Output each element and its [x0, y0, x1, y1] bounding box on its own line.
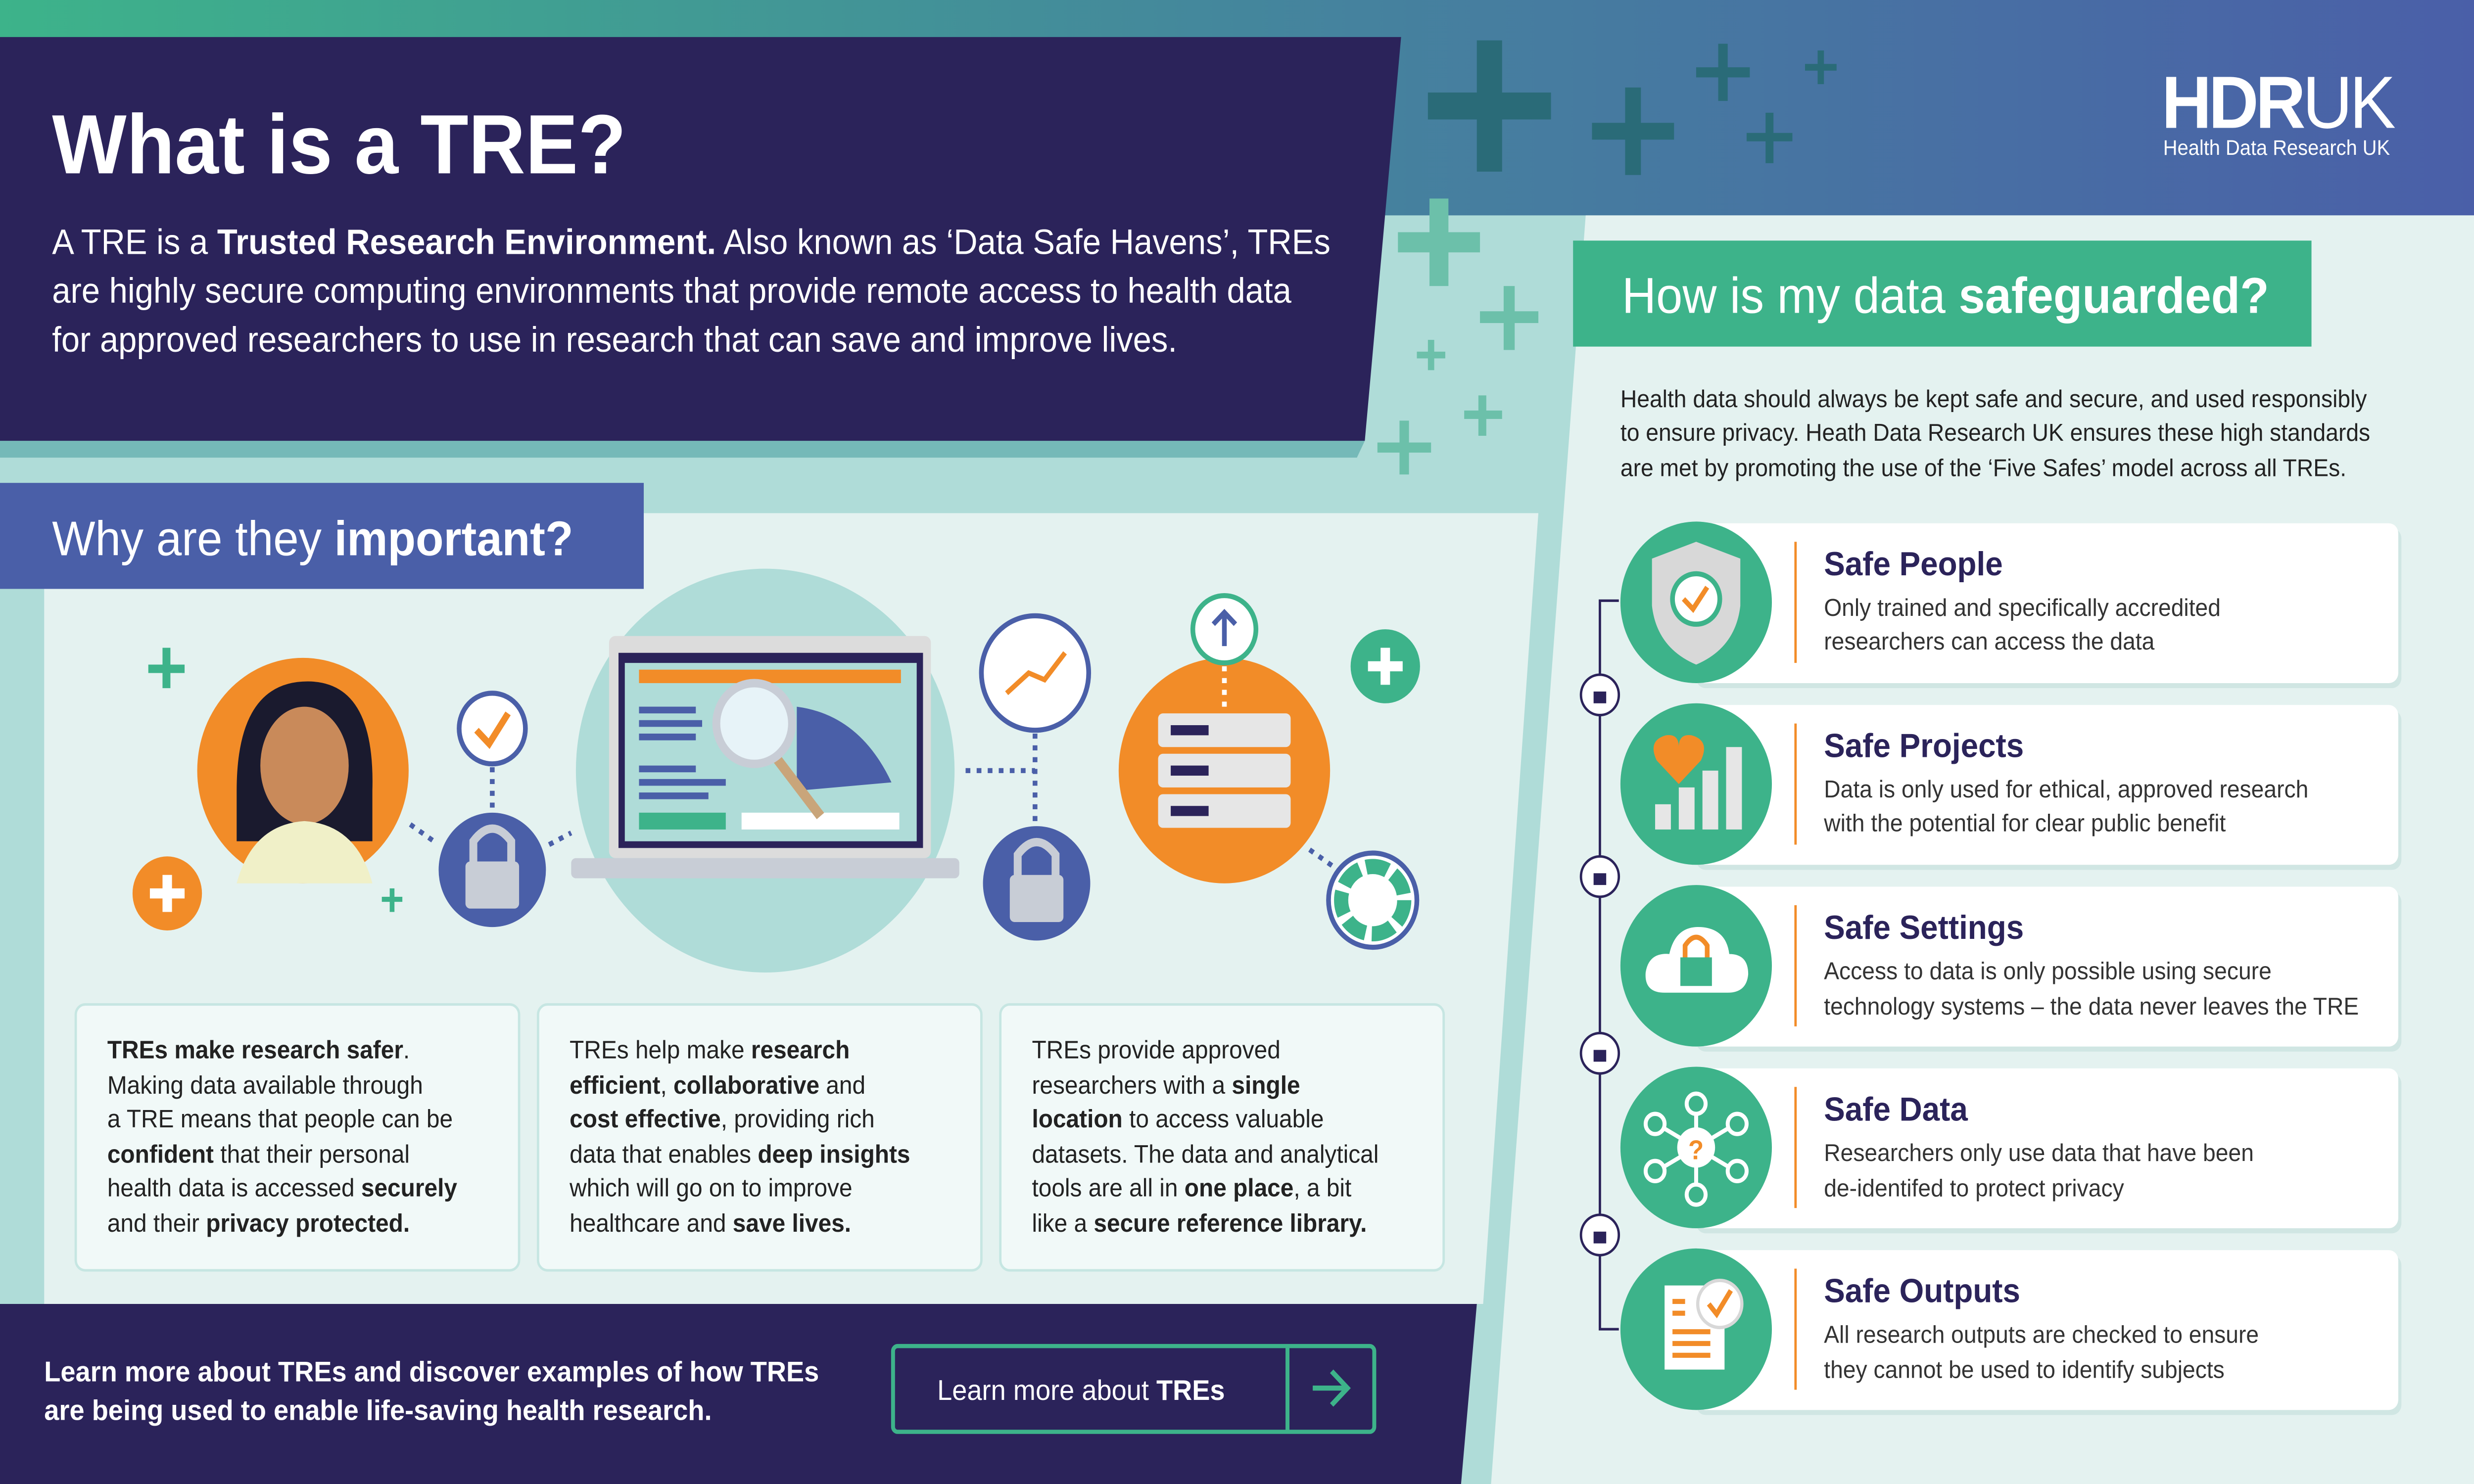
five safes: people: Only trained and specifically accredited	[1824, 595, 2221, 621]
five safes: data: Researchers only use data that have been	[1824, 1140, 2254, 1166]
five safes: outputs: All research outputs are checked to ensure	[1824, 1321, 2259, 1348]
five safes: settings: Access to data is only possible using secure	[1824, 958, 2272, 985]
card 3: datasets. The data and analytical	[1032, 1140, 1379, 1168]
intro panel	[0, 37, 1401, 458]
card 1: TREs make research safer.	[107, 1036, 410, 1064]
heading: why	[0, 483, 644, 589]
button	[893, 1346, 1374, 1432]
card 3: TREs provide approved	[1032, 1036, 1281, 1064]
card 3: tools are all in one place, a bit	[1032, 1174, 1351, 1202]
card 3	[1000, 1005, 1444, 1270]
person	[197, 658, 409, 883]
card 3: like a secure reference library.	[1032, 1209, 1367, 1237]
footer panel: are being used to enable life-saving health research.	[44, 1394, 712, 1426]
card 2: TREs help make research	[570, 1036, 850, 1064]
five safes: outputs	[1620, 1249, 2401, 1415]
five safes: projects: Data is only used for ethical, approved research	[1824, 776, 2308, 803]
five safes: settings: Safe Settings	[1824, 908, 2024, 946]
five safes: projects	[1620, 703, 2401, 870]
button: Learn more about TREs	[937, 1374, 1225, 1406]
lock 2	[983, 826, 1090, 940]
intro text: are highly secure computing environments that provide remote access to health data	[52, 271, 1291, 311]
illustration	[133, 569, 1420, 973]
card 1: Making data available through	[107, 1071, 423, 1099]
five safes: outputs: they cannot be used to identify subjects	[1824, 1356, 2225, 1384]
card 2	[538, 1005, 981, 1270]
heading: safeguarded: How is my data safeguarded?	[1622, 267, 2269, 324]
card 1	[76, 1005, 519, 1270]
five safes: data: Safe Data	[1824, 1090, 1968, 1128]
five safes: people: Safe People	[1824, 545, 2003, 583]
card 1: a TRE means that people can be	[107, 1105, 453, 1133]
intro text: for approved researchers to use in research that can save and improve lives.	[52, 320, 1177, 359]
crosses	[148, 648, 402, 912]
heading: safeguarded	[1573, 240, 2312, 347]
card 2: cost effective, providing rich	[570, 1105, 875, 1133]
decorative crosses	[1428, 41, 1837, 175]
card 3: location to access valuable	[1032, 1105, 1324, 1133]
timeline	[1581, 601, 1619, 1329]
five safes: settings: technology systems – the data never leaves the TRE	[1824, 993, 2359, 1020]
logo: HDRUK	[2162, 61, 2395, 143]
card 2: which will go on to improve	[569, 1174, 853, 1202]
card 1: health data is accessed securely	[107, 1174, 457, 1202]
five safes: data: ?	[1688, 1135, 1704, 1165]
right panel background	[1491, 215, 2474, 1484]
safeguard intro: to ensure privacy. Heath Data Research UK ensures these high standards	[1620, 419, 2370, 447]
title: What is a TRE?	[52, 97, 626, 191]
five safes: projects: with the potential for clear public benefit	[1823, 810, 2226, 837]
five safes: data: de-identifed to protect privacy	[1824, 1175, 2124, 1202]
five safes: people: researchers can access the data	[1824, 628, 2155, 655]
card 1: confident that their personal	[107, 1140, 410, 1168]
top band	[0, 0, 2474, 215]
five safes: people	[1620, 521, 2401, 688]
card 2: efficient, collaborative and	[570, 1071, 865, 1099]
card 2: data that enables deep insights	[570, 1140, 910, 1168]
safeguard intro: Health data should always be kept safe and secure, and used responsibly	[1620, 386, 2367, 413]
safeguard intro: are met by promoting the use of the ‘Five Safes’ model across all TREs.	[1620, 455, 2346, 482]
heading: why: Why are they important?	[52, 511, 573, 566]
five safes: data	[1620, 1067, 2401, 1233]
card 2: healthcare and save lives.	[570, 1209, 851, 1237]
five safes: outputs: Safe Outputs	[1824, 1272, 2020, 1309]
check bubble	[459, 693, 525, 764]
card 3: researchers with a single	[1032, 1071, 1300, 1099]
left panel background	[44, 513, 1538, 1304]
logo: Health Data Research UK	[2163, 136, 2390, 159]
five safes: settings	[1620, 885, 2401, 1052]
lock 1	[438, 813, 546, 927]
chart bubble	[981, 616, 1089, 730]
card 1: and their privacy protected.	[107, 1209, 410, 1237]
server	[1119, 658, 1330, 883]
five safes: projects: Safe Projects	[1824, 727, 2024, 764]
footer panel: Learn more about TREs and discover examples of how TREs	[44, 1355, 819, 1388]
pie bubble	[1329, 853, 1417, 947]
footer panel	[0, 1304, 1477, 1484]
laptop	[609, 636, 931, 858]
intro text: A TRE is a Trusted Research Environment. Also known as ‘Data Safe Havens’, TREs	[52, 222, 1331, 262]
